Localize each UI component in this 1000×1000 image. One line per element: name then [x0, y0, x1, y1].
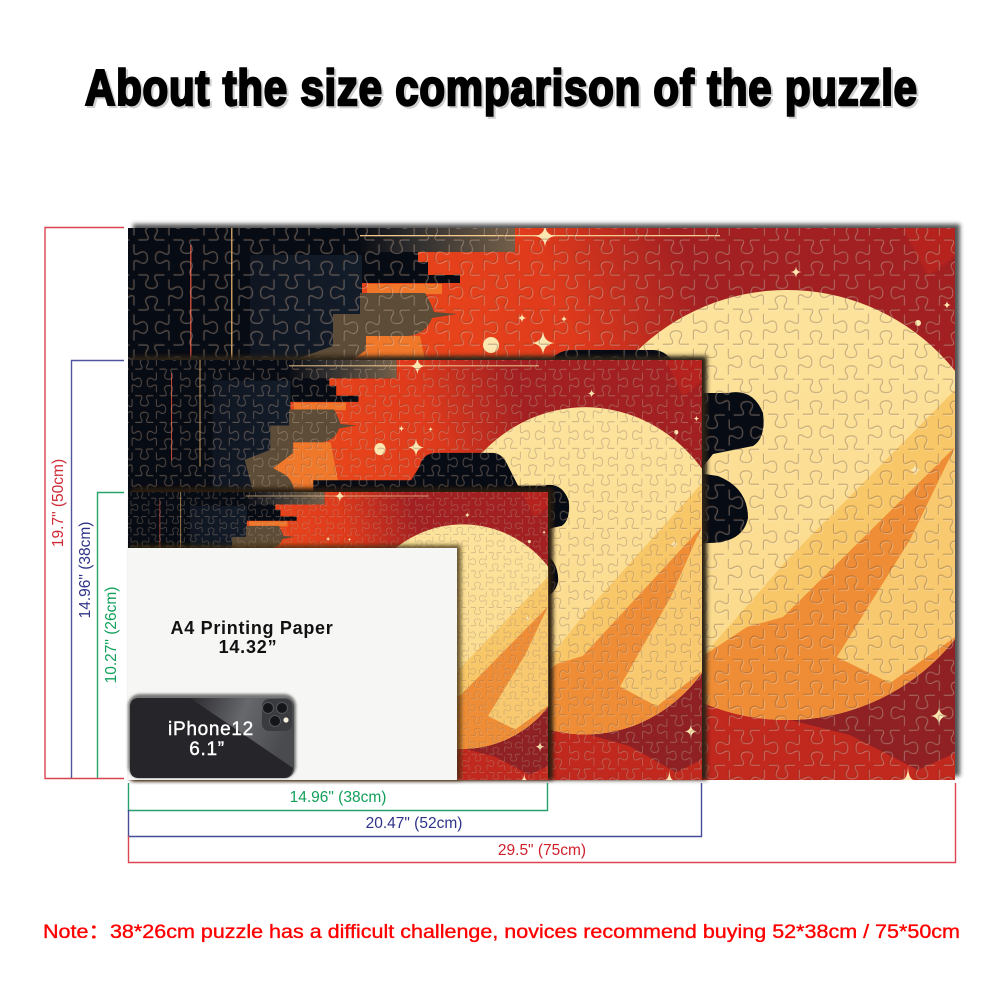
dimension: width 75cm [128, 783, 956, 862]
note: Note：38*26cm puzzle has a difficult challenge, novices recommend buying 52*38cm / 75*50cm [43, 921, 960, 943]
title: About the size comparison of the puzzle [85, 59, 917, 116]
title: About the size comparison of the puzzle [87, 61, 919, 118]
dimension: width 52cm: 20.47" (52cm) [366, 815, 462, 832]
icon: iPhone 12: 6.1” [189, 739, 225, 760]
panel: medium puzzle 52x38cm [128, 356, 735, 791]
dimension: height 50cm: 19.7" (50cm) [50, 459, 67, 547]
panel: A4 printing paper [128, 545, 461, 780]
panel: A4 printing paper: A4 Printing Paper [171, 618, 333, 638]
dimension: height 26cm: 10.27" (26cm) [103, 587, 120, 683]
icon: iPhone 12: iPhone12 [168, 719, 254, 740]
dimension: width 52cm [128, 783, 702, 836]
icon: iPhone 12 [128, 694, 296, 778]
dimension: width 38cm [128, 783, 548, 810]
panel: large puzzle 75x50cm [128, 224, 1000, 794]
dimension: height 26cm [98, 492, 124, 778]
dimension: height 38cm [72, 360, 124, 778]
dimension: height 50cm [45, 228, 124, 778]
dimension: width 38cm: 14.96" (38cm) [290, 789, 386, 806]
panel: A4 printing paper: 14.32” [219, 637, 277, 657]
panel: small puzzle 38x26cm [128, 488, 572, 787]
dimension: height 38cm: 14.96" (38cm) [77, 522, 94, 618]
dimension: width 75cm: 29.5" (75cm) [498, 842, 586, 859]
